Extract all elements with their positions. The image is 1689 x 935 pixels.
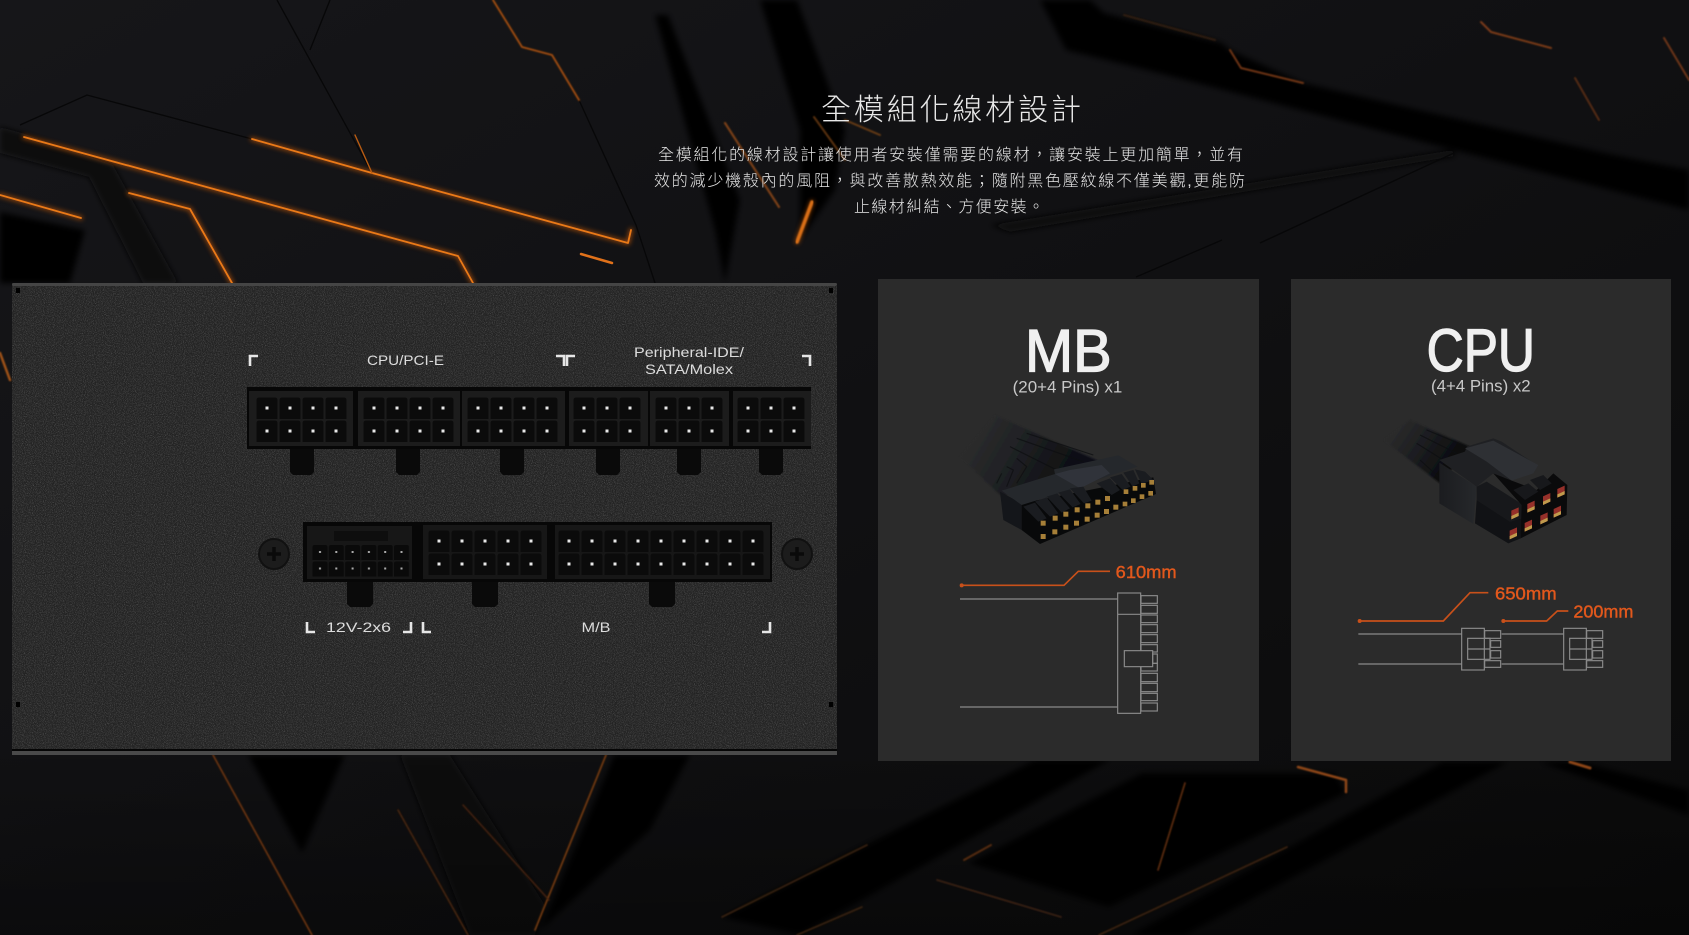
CPU pin count: (4+4 Pins) x2 xyxy=(1431,377,1531,396)
description text xyxy=(654,146,1245,216)
panel: CPU cable xyxy=(1291,279,1671,761)
MB length leader 610mm: 610mm xyxy=(1116,562,1177,582)
panel: MB cable xyxy=(878,279,1259,761)
icon: 8-pin connector photo xyxy=(1383,420,1567,543)
connector row: CPU/PCI-E and peripheral xyxy=(247,387,811,475)
CPU length leaders 650mm and 200mm xyxy=(1358,583,1633,623)
description text: 止線材糾結、方便安裝。 xyxy=(854,198,1044,216)
connector labels: 12V-2x6 xyxy=(326,619,391,635)
CPU title: CPU xyxy=(1427,317,1535,384)
icon: left screw xyxy=(259,539,289,569)
description text: 效的減少機殼內的風阻，與改善散熱效能；隨附黑色壓紋線不僅美觀,更能防 xyxy=(654,172,1245,190)
MB length leader 610mm xyxy=(960,562,1177,587)
icon: right screw xyxy=(782,539,812,569)
connector labels: M/B xyxy=(582,619,610,635)
MB pin count: (20+4 Pins) x1 xyxy=(1013,378,1122,397)
connector labels: CPU/PCI-E xyxy=(367,352,444,368)
MB connector line drawing xyxy=(960,593,1157,713)
heading: 全模組化線材設計 xyxy=(821,94,1081,127)
description text: 全模組化的線材設計讓使用者安裝僅需要的線材，讓安裝上更加簡單，並有 xyxy=(658,146,1243,164)
connector label brackets xyxy=(250,356,810,632)
panel: PSU rear modular connector plate xyxy=(12,283,837,755)
MB title: MB xyxy=(1025,318,1112,385)
connector row: 12V-2x6 and M/B xyxy=(303,522,772,607)
CPU length leaders 650mm and 200mm: 200mm xyxy=(1573,602,1633,622)
CPU length leaders 650mm and 200mm: 650mm xyxy=(1495,583,1557,603)
connector labels xyxy=(326,344,744,635)
connector labels: Peripheral-IDE/ xyxy=(634,344,744,360)
connector labels: SATA/Molex xyxy=(645,361,733,377)
CPU connector line drawing xyxy=(1358,628,1603,670)
icon: 24-pin connector photo xyxy=(960,415,1156,544)
